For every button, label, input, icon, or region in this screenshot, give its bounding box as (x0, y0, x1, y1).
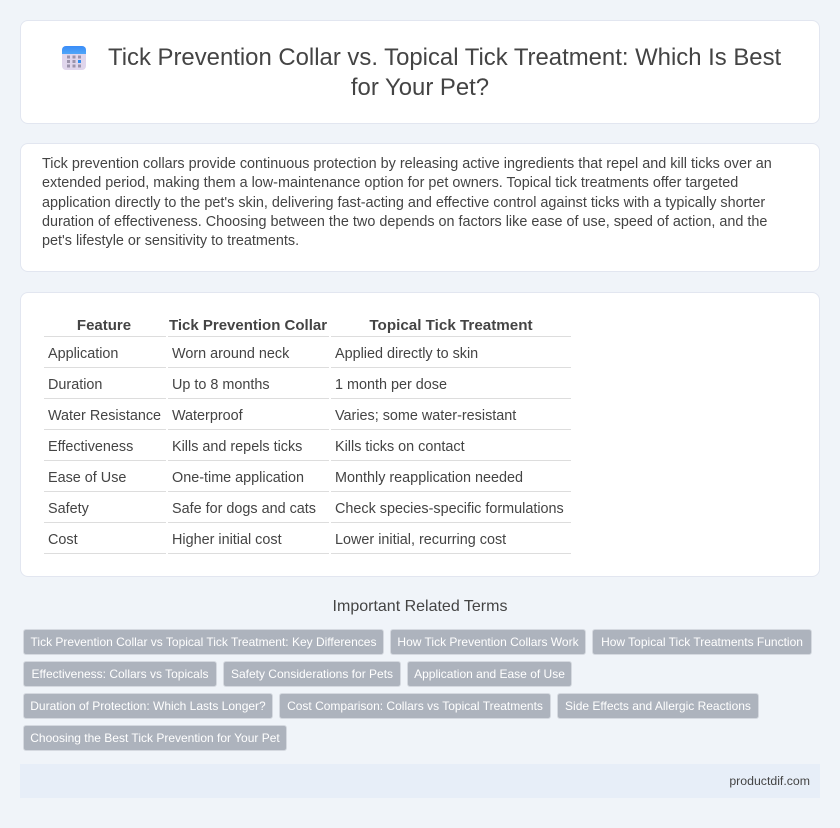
intro paragraph: pet's lifestyle or sensitivity to treatments. (42, 233, 299, 249)
tags: related terms: Duration of Protection: Which Lasts Longer? (30, 699, 266, 713)
title: Tick Prevention Collar vs. Topical Tick Treatment: Which Is Best (108, 44, 781, 71)
tags: related terms: Choosing the Best Tick Prevention for Your Pet (30, 731, 280, 745)
panel: comparison table: Safe for dogs and cats (172, 501, 316, 517)
tags: related terms: Side Effects and Allergic Reactions (565, 699, 751, 713)
tags: related terms: Application and Ease of Use (414, 667, 565, 681)
icon: calendar (62, 46, 86, 70)
panel: comparison table: Lower initial, recurring cost (335, 532, 506, 548)
panel: comparison table: Kills ticks on contact (335, 439, 465, 455)
panel: intro text (20, 143, 820, 272)
panel: comparison table: Kills and repels ticks (172, 439, 302, 455)
panel: comparison table: Tick Prevention Collar (169, 317, 327, 334)
panel: comparison table: Higher initial cost (172, 532, 282, 548)
panel: comparison table: Check species-specific formulations (335, 501, 564, 517)
tags: related terms: How Tick Prevention Collars Work (397, 635, 579, 649)
row: water resistance: Water Resistance (48, 408, 161, 424)
panel: comparison table (20, 292, 820, 577)
tags: related terms: How Topical Tick Treatments Function (601, 635, 803, 649)
table header: Feature (77, 317, 131, 334)
panel: comparison table: Up to 8 months (172, 377, 270, 393)
intro paragraph: application directly to the pet's skin, delivering fast-acting and effective control against ticks with a typically shorter (42, 194, 765, 210)
row: effectiveness: Effectiveness (48, 439, 133, 455)
row: duration: Duration (48, 377, 102, 393)
footer source: productdif.com (729, 774, 810, 788)
panel: header (20, 20, 820, 124)
intro paragraph: duration of effectiveness. Choosing between the two depends on factors like ease of use, speed of action, and the (42, 214, 767, 230)
row: cost: Cost (48, 532, 78, 548)
tags: related terms: Tick Prevention Collar vs Topical Tick Treatment: Key Differences (31, 635, 376, 649)
panel: comparison table: Varies; some water-resistant (335, 408, 516, 424)
intro paragraph (42, 156, 772, 249)
row: application: Application (48, 346, 118, 362)
tags: related terms: Safety Considerations for Pets (231, 667, 393, 681)
tags: related terms: Cost Comparison: Collars vs Topical Treatments (287, 699, 543, 713)
intro paragraph: Tick prevention collars provide continuous protection by releasing active ingredients that repel and kill ticks over an (42, 156, 772, 172)
title (108, 44, 781, 100)
panel: comparison table: Monthly reapplication needed (335, 470, 523, 486)
row: safety: Safety (48, 501, 89, 517)
panel: comparison table: Worn around neck (172, 346, 289, 362)
panel: comparison table: 1 month per dose (335, 377, 447, 393)
heading: related terms: Important Related Terms (333, 598, 507, 615)
panel: comparison table: Waterproof (172, 408, 243, 424)
row: ease of use: Ease of Use (48, 470, 126, 486)
panel: comparison table: One-time application (172, 470, 304, 486)
intro paragraph: extended period, making them a low-maintenance option for pet owners. Topical tick treatments offer targeted (42, 175, 738, 191)
panel: comparison table: Topical Tick Treatment (369, 317, 533, 334)
panel: comparison table: Applied directly to skin (335, 346, 478, 362)
footer (20, 764, 820, 798)
tags: related terms: Effectiveness: Collars vs Topicals (32, 667, 208, 681)
title: for Your Pet? (351, 74, 489, 100)
